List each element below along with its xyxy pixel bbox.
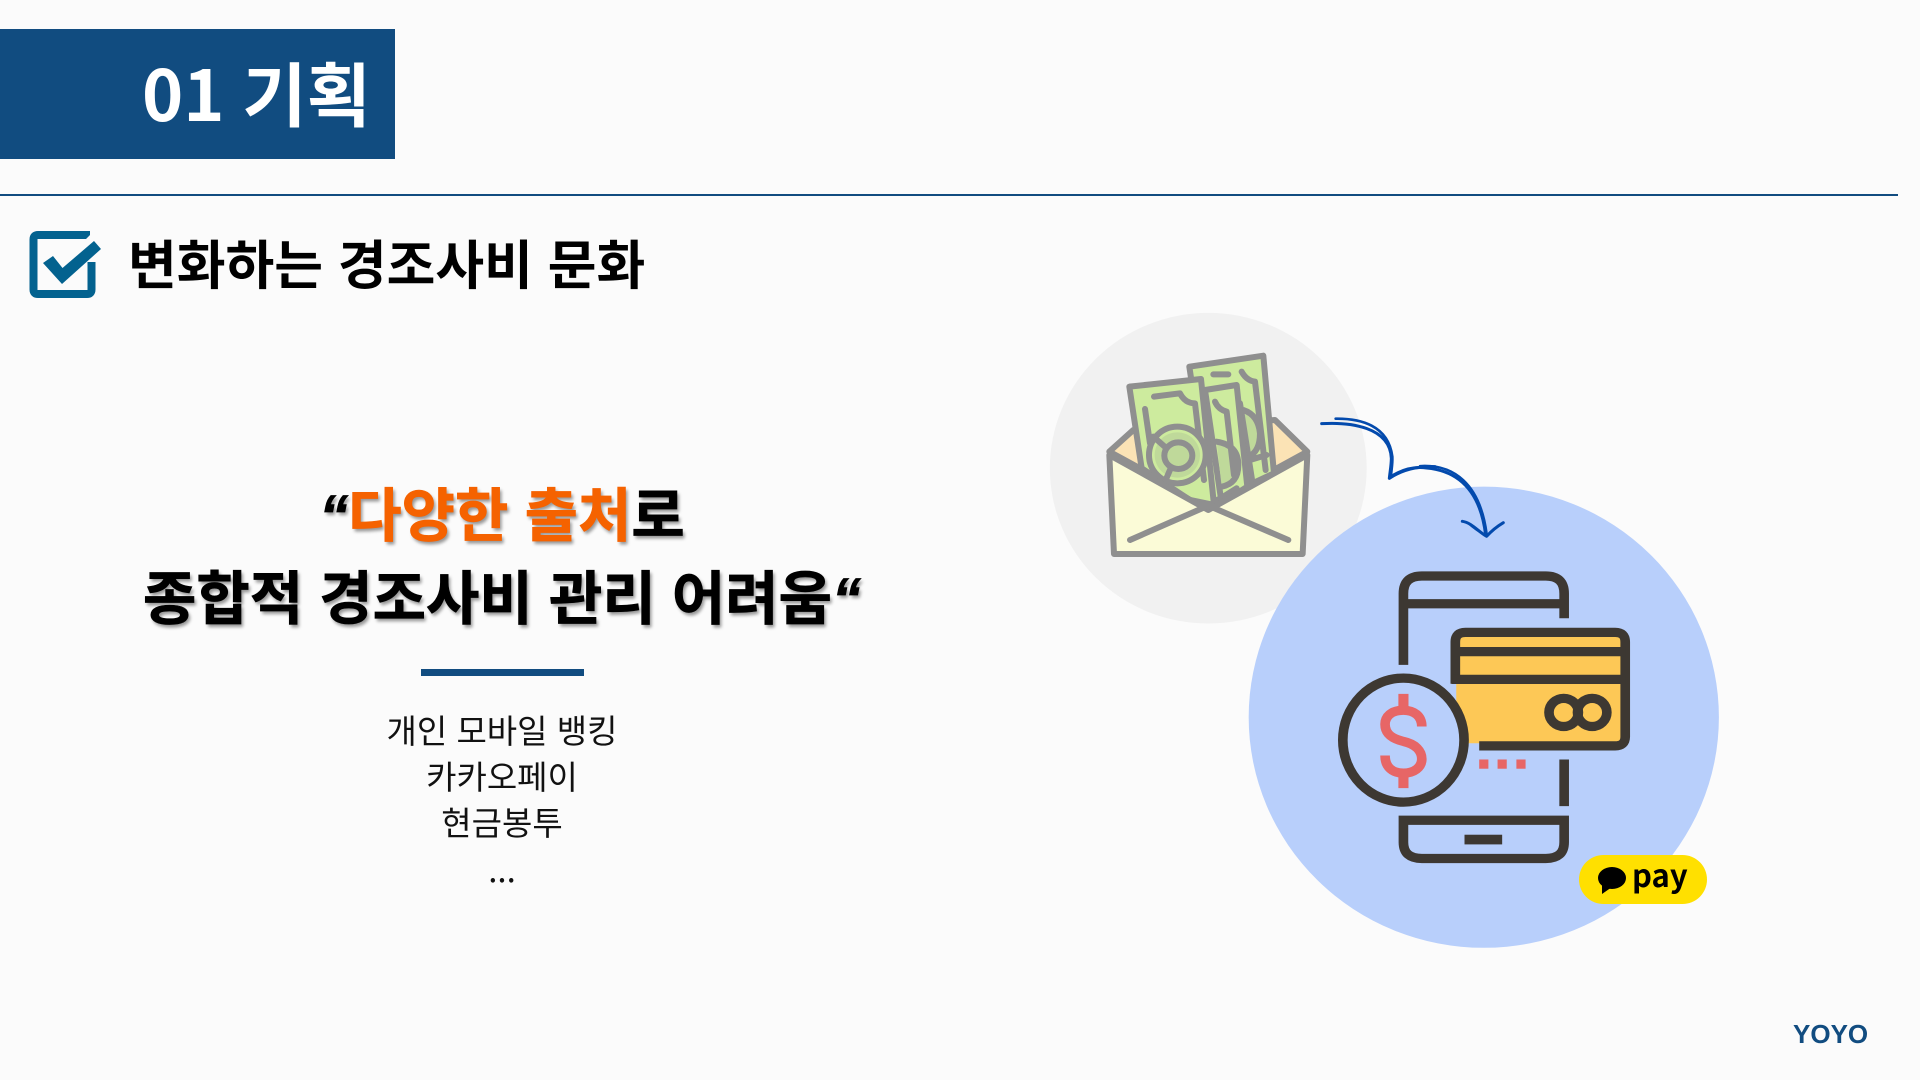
credit card (1452, 632, 1625, 746)
payment list: 개인 모바일 뱅킹 (386, 705, 618, 753)
icon: money envelope (1109, 356, 1307, 554)
quote heading: 종합적 경조사비 관리 어려움“ (143, 552, 861, 636)
payment list: 현금봉투 (441, 797, 563, 845)
coin (1343, 678, 1464, 802)
quote heading (143, 469, 864, 636)
icon: checkbox (30, 231, 101, 298)
kakao pay badge (1579, 851, 1707, 904)
blue circle (1249, 487, 1719, 948)
quote heading: “다양한 출처로 (319, 469, 685, 553)
section heading: 변화하는 경조사비 문화 (128, 224, 645, 300)
arrow (1322, 419, 1503, 536)
title text: 01 기획 (142, 41, 371, 142)
payment list (386, 705, 618, 893)
icon: phone with card and coin (1343, 576, 1625, 858)
kakao pay badge: pay (1632, 851, 1688, 896)
divider bar (421, 669, 584, 676)
brand mark: YOYO (1793, 1019, 1868, 1049)
grey circle (1050, 313, 1367, 624)
payment list: 카카오페이 (426, 751, 578, 799)
payment list: ... (488, 845, 516, 893)
title banner (0, 29, 395, 159)
pink dots (1479, 759, 1526, 769)
